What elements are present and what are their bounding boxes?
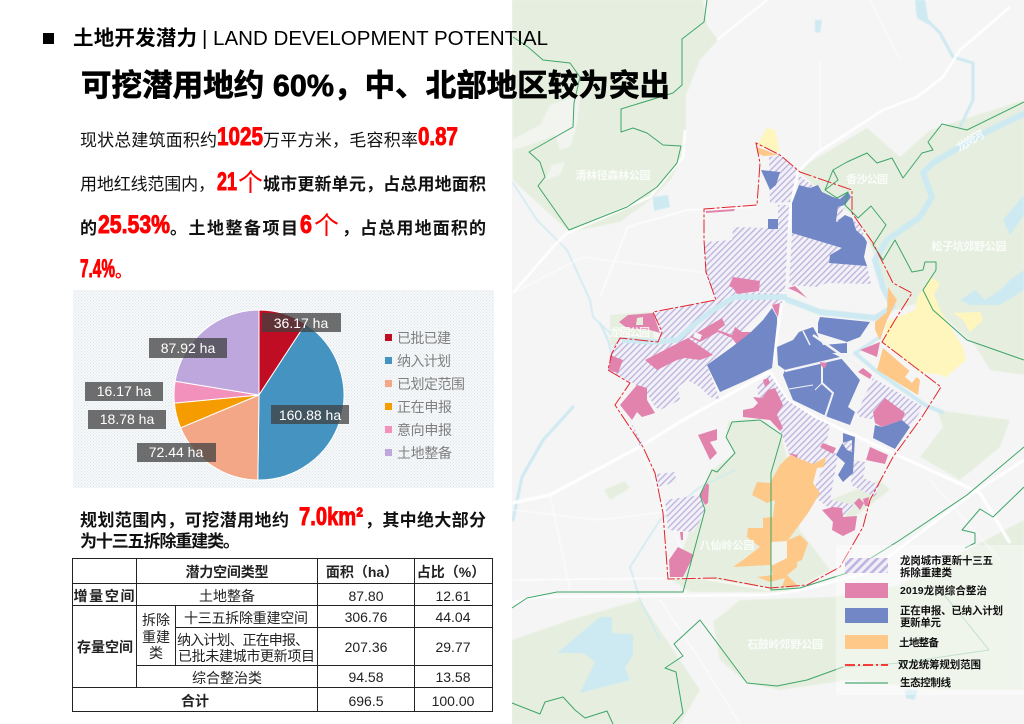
chart: value labels: 87.92 ha xyxy=(161,340,215,356)
table: potential space types: 类 xyxy=(149,645,163,661)
icon: heading bullet xyxy=(43,33,54,44)
text block: summary: 现状总建筑面积约 xyxy=(80,131,217,150)
text block: potential land summary: 7.0km² xyxy=(299,503,363,531)
map: ecological control lines xyxy=(512,0,1024,724)
table: potential space types: 87.80 xyxy=(348,588,384,604)
map: place labels xyxy=(576,127,1006,651)
legend: comprehensive improvement: 2019龙岗综合整治 xyxy=(900,584,988,597)
legend: hatched renewal xyxy=(845,554,993,579)
chart: value labels: 160.88 ha xyxy=(279,407,341,423)
table: potential space types: 面积（ha） xyxy=(326,564,398,580)
table: potential space types: 占比（%） xyxy=(417,564,485,580)
table: potential space types: 增量空间 xyxy=(74,588,134,604)
chart: value labels: 36.17 ha xyxy=(274,315,328,331)
table: potential space types: 合计 xyxy=(181,693,209,709)
legend: land preparation xyxy=(845,635,940,649)
map: place labels: 清林径森林公园 xyxy=(576,168,650,182)
table: potential space types: 207.36 xyxy=(345,639,388,655)
table: potential space types: 12.61 xyxy=(435,588,471,604)
text block: summary: 1025 xyxy=(217,123,263,151)
chart: legend xyxy=(385,330,465,461)
map: place labels: 松子坑郊野公园 xyxy=(932,239,1006,253)
text block: summary: 。 xyxy=(115,262,132,281)
text block: summary: 城市更新单元，占总用地面积 xyxy=(263,174,486,194)
table: potential space types: 696.5 xyxy=(348,693,384,709)
text block: summary: 个 xyxy=(314,206,339,242)
legend: ecological line xyxy=(845,676,952,689)
map: land preparation areas xyxy=(733,128,983,587)
legend: planning boundary: 双龙统筹规划范围 xyxy=(898,658,981,671)
legend: hatched renewal: 拆除重建类 xyxy=(900,566,952,579)
chart: legend: 已划定范围 xyxy=(397,376,465,392)
legend: comprehensive improvement xyxy=(845,583,988,598)
chart: legend: 意向申报 xyxy=(397,422,452,438)
map: planning boundary xyxy=(608,143,941,588)
text block: summary: 。土地整备项目 xyxy=(170,218,298,238)
title: 可挖潜用地约 60%，中、北部地区较为突出 xyxy=(81,69,670,103)
table: potential space types: 已批未建城市更新项目 xyxy=(178,648,315,664)
chart: legend: 已批已建 xyxy=(397,330,451,346)
text block: summary: ，占总用地面积的 xyxy=(342,219,486,238)
table: potential space types: 306.76 xyxy=(345,609,388,625)
heading xyxy=(43,27,548,50)
table: potential space types: 存量空间 xyxy=(77,639,133,655)
table: potential space types: 综合整治类 xyxy=(192,670,262,686)
map: place labels: 龙园公园 xyxy=(610,325,650,339)
text block: summary: 的 xyxy=(80,219,97,238)
table: potential space types: 纳入计划、正在申报、 xyxy=(177,632,309,648)
chart: value labels: 18.78 ha xyxy=(100,411,154,427)
table: potential space types: 拆除 xyxy=(142,612,170,628)
map legend xyxy=(836,545,1024,695)
text block: potential land summary: ，其中绝大部分 xyxy=(365,510,486,530)
table: potential space types: 100.00 xyxy=(432,693,475,709)
map: place labels: 八仙岭公园 xyxy=(700,538,754,552)
panel: pie chart xyxy=(73,290,494,488)
table: potential space types: 94.58 xyxy=(348,669,384,685)
heading: | LAND DEVELOPMENT POTENTIAL xyxy=(202,27,548,50)
heading: 土地开发潜力 xyxy=(73,27,197,50)
text block: summary: 6 xyxy=(300,211,312,239)
map: place labels: 龙岗河 xyxy=(954,127,986,154)
map: place labels: 香沙公园 xyxy=(846,172,888,186)
map: urban renewal hatched areas xyxy=(608,155,923,532)
green parks xyxy=(512,0,1024,724)
legend: under application xyxy=(845,604,1003,629)
roads xyxy=(512,0,1024,724)
text block: summary: 0.87 xyxy=(418,123,458,151)
legend: under application: 更新单元 xyxy=(900,616,942,629)
text block: summary: 7.4% xyxy=(80,255,115,283)
chart: value labels xyxy=(85,313,349,462)
table: potential space types: 29.77 xyxy=(435,639,471,655)
chart: legend: 纳入计划 xyxy=(397,353,451,369)
text block: potential land summary: 为十三五拆除重建类。 xyxy=(80,531,240,551)
chart: value labels: 16.17 ha xyxy=(97,383,151,399)
chart: legend: 正在申报 xyxy=(397,399,452,415)
text block: summary: 用地红线范围内， xyxy=(80,175,215,194)
chart: pie slices xyxy=(174,310,344,480)
table: potential space types: 13.58 xyxy=(435,669,471,685)
text block: summary: 个 xyxy=(238,163,263,199)
table: potential space types: 重建 xyxy=(142,629,170,645)
legend: land preparation: 土地整备 xyxy=(899,636,940,649)
table: potential space types xyxy=(72,558,492,712)
map: river band over hatching xyxy=(622,297,787,342)
text block: summary: 25.53% xyxy=(98,211,170,239)
chart: legend: 土地整备 xyxy=(397,445,452,461)
text block: potential land summary xyxy=(80,503,486,551)
legend: ecological line: 生态控制线 xyxy=(900,676,952,689)
text block: summary: 万平方米，毛容积率 xyxy=(263,131,418,150)
panel: base map xyxy=(512,0,1024,724)
map: place labels: 石鼓岭郊野公园 xyxy=(747,637,823,651)
map: renewal units under application xyxy=(707,170,910,482)
text block: summary: 21 xyxy=(217,168,237,196)
rivers and lakes xyxy=(513,10,1024,640)
table: potential space types: 44.04 xyxy=(435,609,471,625)
map: 2019 comprehensive improvement areas xyxy=(609,209,905,577)
table: potential space types: 潜力空间类型 xyxy=(186,564,268,580)
table: potential space types: 十三五拆除重建空间 xyxy=(184,610,308,626)
text block: summary xyxy=(80,123,486,283)
legend: under application: 正在申报、已纳入计划 xyxy=(900,604,1003,617)
legend: planning boundary xyxy=(845,658,981,671)
legend: hatched renewal: 龙岗城市更新十三五 xyxy=(900,554,993,567)
text block: potential land summary: 规划范围内，可挖潜用地约 xyxy=(80,510,289,530)
chart: value labels: 72.44 ha xyxy=(149,444,203,460)
table: potential space types: 土地整备 xyxy=(199,588,255,604)
